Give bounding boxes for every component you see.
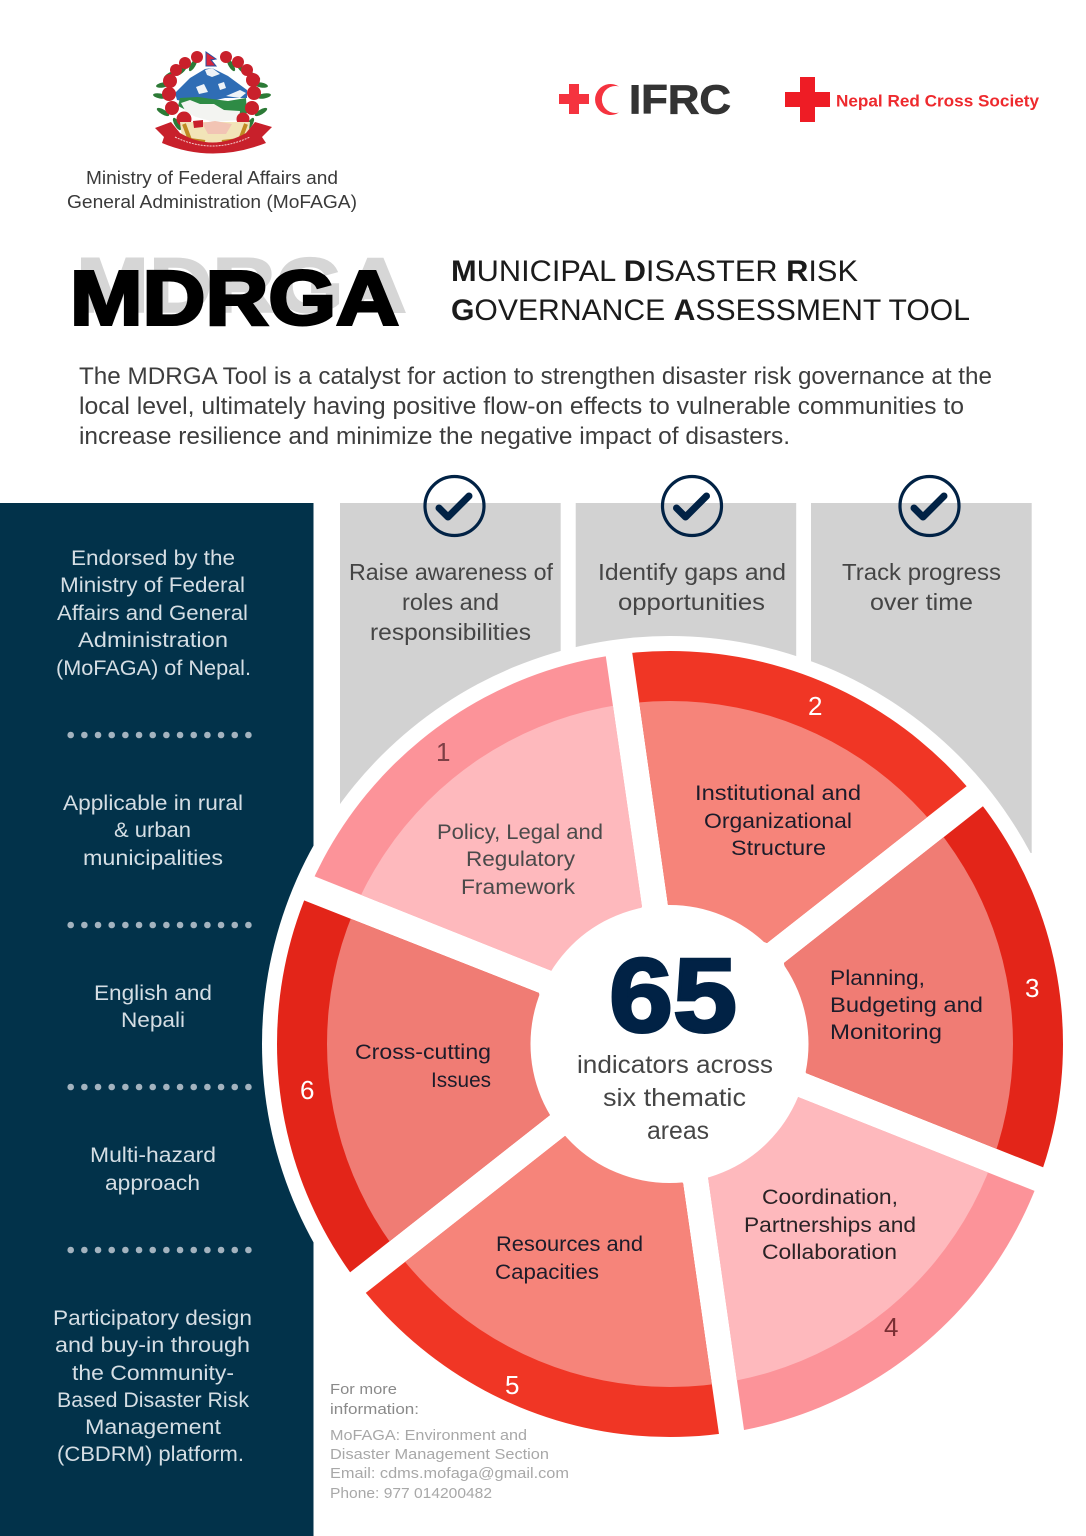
sidebar text: applicability: Applicable in rural [63,791,243,815]
sidebar text: participatory design: the Community- [72,1361,234,1385]
sidebar text: hazards: approach [105,1171,200,1195]
wheel segment 2: Institutional and Organizational Structure [632,651,967,943]
wheel segment 4: Coordination, Partnerships and Collaboration: Collaboration [762,1240,897,1264]
wheel segment 6: Cross-cutting Issues [277,900,550,1272]
contact information [330,1381,569,1502]
wheel segment 5: Resources and Capacities: Capacities [495,1260,599,1284]
wheel segment 3: Planning, Budgeting and Monitoring: Monitoring [830,1020,942,1044]
wheel segment 2: Institutional and Organizational Structure: Institutional and [695,781,861,805]
card text: raise awareness: responsibilities [370,619,531,645]
icon: check 2 [662,476,722,536]
card text: raise awareness: roles and [402,589,499,615]
sidebar text: endorsement: Affairs and General [57,601,248,625]
wheel segment 3: Planning, Budgeting and Monitoring: Budgeting and [830,993,983,1017]
sidebar text: endorsement: Ministry of Federal [60,573,245,597]
wheel segment 5: Resources and Capacities: Resources and [496,1232,643,1256]
contact information: Email: cdms.mofaga@gmail.com [330,1465,569,1482]
wheel segment 3: Planning, Budgeting and Monitoring: Planning, [830,966,925,990]
contact information: Disaster Management Section [330,1446,549,1463]
wheel segment 1: Policy, Legal and Regulatory Framework: 1 [436,737,450,767]
intro paragraph [79,363,992,450]
sidebar text: participatory design: Management [85,1415,221,1439]
ministry caption [67,168,357,212]
wheel segment 3: Planning, Budgeting and Monitoring: 3 [1025,973,1039,1003]
title [451,255,970,327]
wheel segment 4: Coordination, Partnerships and Collaboration [708,1097,1034,1430]
sidebar text: endorsement: Endorsed by the [71,546,235,570]
sidebar text: applicability: & urban [114,818,191,842]
panel: navy sidebar background [0,503,314,1536]
icon: check 3 [900,476,959,536]
MDRGA wordmark: MDRGA [76,241,407,329]
centre hub: 65 indicators: areas [647,1117,709,1145]
ministry caption: Ministry of Federal Affairs and [86,168,338,188]
sidebar text: languages: Nepali [121,1008,185,1032]
card text: identify gaps: opportunities [618,589,765,615]
intro paragraph: The MDRGA Tool is a catalyst for action to strengthen disaster risk governance at the [79,363,992,390]
sidebar text: participatory design: Based Disaster Risk [57,1388,249,1412]
intro paragraph: increase resilience and minimize the negative impact of disasters. [79,423,790,450]
contact information: MoFAGA: Environment and [330,1427,527,1444]
sidebar text: hazards: Multi-hazard [90,1143,216,1167]
sidebar text: participatory design [53,1306,252,1466]
wheel segment 5: Resources and Capacities: 5 [505,1370,519,1400]
wheel segment 1: Policy, Legal and Regulatory Framework: Regulatory [466,847,575,871]
sidebar text: participatory design: and buy-in through [55,1333,250,1357]
logo: Nepal Red Cross Society [785,77,1040,122]
contact information: Phone: 977 014200482 [330,1485,492,1502]
wheel segment 2: Institutional and Organizational Structure: Structure [731,836,826,860]
wheel segment 5: Resources and Capacities [366,1136,719,1437]
sidebar dotted separators [71,735,250,1250]
title: GOVERNANCE ASSESSMENT TOOL [451,294,970,327]
wheel segment 6: Cross-cutting Issues: 6 [300,1075,314,1105]
wheel segment 4: Coordination, Partnerships and Collaboration: Coordination, [762,1185,898,1209]
centre hub: 65 indicators: six thematic [603,1084,746,1112]
logo: IFRC [559,76,731,122]
icon: check 1 [425,476,484,536]
wheel segment 6: Cross-cutting Issues: Cross-cutting [355,1040,491,1064]
contact information: information: [330,1401,419,1418]
card text: raise awareness [349,559,554,645]
centre hub: 65 indicators [530,905,808,1183]
sidebar text: endorsement: Administration [78,628,228,652]
title: MUNICIPAL DISASTER RISK [451,255,858,288]
card text: track progress [842,559,1001,615]
panel: grey objective cards [340,503,1032,853]
card text: raise awareness: Raise awareness of [349,559,554,585]
sidebar text: endorsement: (MoFAGA) of Nepal. [56,656,251,680]
wheel segment 3: Planning, Budgeting and Monitoring [784,806,1063,1168]
centre hub: 65 indicators: indicators across [577,1051,773,1079]
card text: identify gaps: Identify gaps and [598,559,786,585]
emblem: Government of Nepal coat of arms [153,51,272,154]
sidebar text: languages [94,981,212,1032]
sidebar text: participatory design: Participatory design [53,1306,252,1330]
logo: Nepal Red Cross Society: Nepal Red Cross Society [836,92,1040,110]
sidebar text: applicability [63,791,243,870]
wheel segment 4: Coordination, Partnerships and Collaboration: Partnerships and [744,1213,916,1237]
sidebar text: applicability: municipalities [83,846,223,870]
wheel segment 1: Policy, Legal and Regulatory Framework [314,656,642,971]
sidebar text: hazards [90,1143,216,1195]
wheel segment 2: Institutional and Organizational Structure: 2 [808,691,822,721]
wheel segment 2: Institutional and Organizational Structure: Organizational [704,809,852,833]
ministry caption: General Administration (MoFAGA) [67,192,357,212]
logo: IFRC: IFRC [629,76,731,122]
card text: track progress: Track progress [842,559,1001,585]
sidebar text: endorsement [56,546,251,680]
contact information: For more [330,1381,397,1398]
white wheel backing [262,636,1078,1452]
wheel segment 6: Cross-cutting Issues: Issues [431,1068,491,1092]
wheel segment 1: Policy, Legal and Regulatory Framework: Policy, Legal and [437,820,603,844]
intro paragraph: local level, ultimately having positive flow-on effects to vulnerable communities to [79,393,964,420]
wheel segment 4: Coordination, Partnerships and Collaboration: 4 [884,1312,898,1342]
wheel segment 1: Policy, Legal and Regulatory Framework: Framework [461,875,575,899]
card text: track progress: over time [870,589,973,615]
sidebar text: participatory design: (CBDRM) platform. [57,1442,244,1466]
sidebar text: languages: English and [94,981,212,1005]
centre hub: 65 indicators: 65 [609,938,737,1054]
MDRGA wordmark: MDRGA [70,256,399,342]
card text: identify gaps [598,559,786,615]
